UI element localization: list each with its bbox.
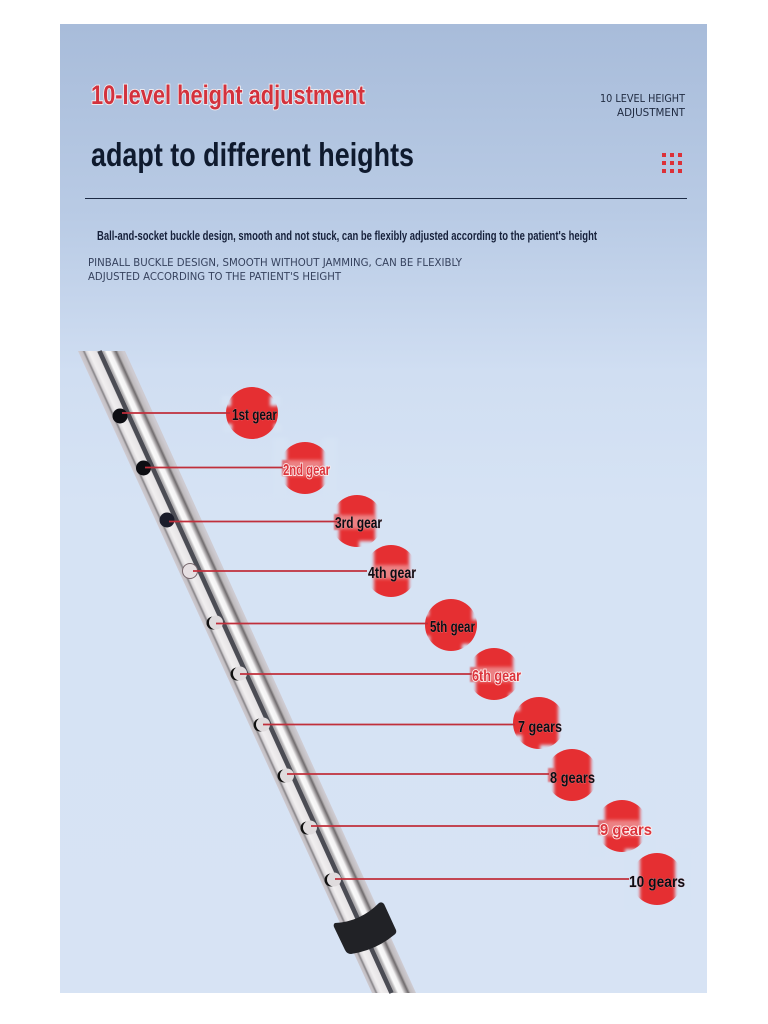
- crutch tube with holes and collar: [78, 351, 416, 993]
- gear 9: 9 gears: [600, 822, 652, 839]
- title: 10-level height adjustment: 10-level height adjustment: [91, 80, 365, 110]
- gear 4: 4th gear: [368, 565, 416, 582]
- gear 4: [193, 541, 423, 601]
- gear 10: 10 gears: [629, 874, 685, 891]
- gear 1: 1st gear: [232, 407, 277, 424]
- gear 5: [216, 599, 480, 651]
- gear 8: [287, 745, 605, 805]
- uppercase description: PINBALL BUCKLE DESIGN, SMOOTH WITHOUT JAMMING, CAN BE FLEXIBLY: [88, 257, 463, 269]
- gear 6: [240, 644, 527, 704]
- gear 5: 5th gear: [430, 619, 475, 636]
- top right caption: ADJUSTMENT: [617, 107, 686, 119]
- gear 10: [335, 849, 690, 909]
- uppercase description: [88, 257, 463, 283]
- gear 3: [169, 491, 389, 551]
- top right caption: [600, 93, 686, 119]
- gear 9: [311, 796, 655, 856]
- gear 2: [145, 438, 337, 498]
- description: Ball-and-socket buckle design, smooth and not stuck, can be flexibly adjusted according to the patient's height: [97, 229, 598, 243]
- divider line: [85, 198, 687, 199]
- gear 7: [263, 693, 572, 753]
- gear 1: [122, 387, 281, 439]
- top right caption: 10 LEVEL HEIGHT: [600, 93, 686, 105]
- gear 2: 2nd gear: [283, 462, 330, 479]
- adjustment holes: [112, 408, 341, 886]
- dark groove: [100, 351, 392, 993]
- gear 8: 8 gears: [550, 770, 595, 787]
- gear 3: 3rd gear: [335, 515, 382, 532]
- metal tube: [78, 351, 416, 993]
- uppercase description: ADJUSTED ACCORDING TO THE PATIENT'S HEIGHT: [88, 271, 342, 283]
- subtitle: adapt to different heights: adapt to different heights: [91, 136, 414, 173]
- background panel: [60, 24, 707, 993]
- gear 7: 7 gears: [518, 719, 562, 736]
- black collar: [334, 902, 396, 954]
- icon: red dot grid: [662, 153, 682, 173]
- gear 6: 6th gear: [472, 668, 521, 685]
